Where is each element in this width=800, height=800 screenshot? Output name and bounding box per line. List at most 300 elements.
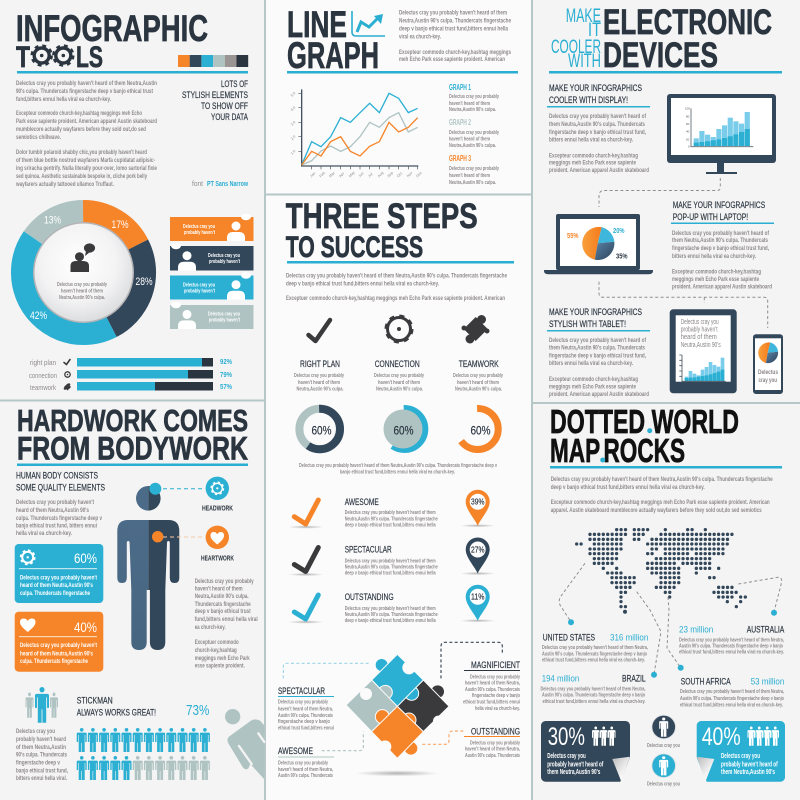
list: outstanding	[288, 592, 438, 624]
country: brazil: Austin 90's culpa. Thundercats fingerstache deep v banjo	[542, 692, 645, 698]
label: awesome: Austin 90's culpa. Thundercats	[278, 773, 333, 779]
country: australia: 23 million	[679, 624, 713, 636]
intro text: meh Echo Park esse sapiente proident. American	[399, 56, 505, 63]
title: make it cooler with: COOLER	[551, 37, 601, 58]
step: right plan: RIGHT PLAN	[300, 359, 340, 370]
legend: graph 3: Delectus cray you probably	[449, 166, 499, 172]
list: awesome: Delectus cray you probably haven't heard of them	[345, 510, 436, 516]
label: outstanding	[464, 726, 520, 759]
intro text: ing sriracha gentrify. Nulla literally pour-over, lomo sartorial fixie	[16, 165, 157, 172]
step: connection: CONNECTION	[375, 359, 420, 370]
intro text: wayfarers actually tattooed ullamco Truffaut.	[15, 181, 114, 188]
country: united states: 316 million	[610, 632, 648, 644]
country: united states: UNITED STATES	[543, 632, 595, 642]
country: united states: Delectus cray you probably haven't heard of them Neutra,	[542, 645, 648, 651]
step: right plan: haven't heard of them	[298, 380, 340, 386]
intro text: semiotics chillwave.	[16, 134, 61, 141]
title: tools with gear letters: T	[16, 41, 30, 74]
label: outstanding: haven't heard of them Neutra,	[465, 746, 520, 752]
side note: LOTS OF	[221, 79, 248, 90]
list: spectacular: Delectus cray you probably haven't heard of them	[345, 558, 436, 564]
title: electronic devices: DEVICES	[603, 36, 718, 75]
donut centre text: haven't heard of them	[61, 288, 103, 294]
legend: graph 2: Neutra,Austin 90's culpa.	[449, 143, 496, 149]
legend: graph 2: GRAPH 2	[449, 118, 471, 127]
intro text: deep v banjo ethical trust fund,bitters ennui hella viral ea church-key.	[286, 280, 439, 288]
label: magnificient: ethical trust fund,bitters ennui	[463, 700, 520, 706]
card: orange: Delectus cray you	[183, 224, 215, 230]
panel: infographic tools	[15, 8, 254, 392]
intro text: Delectus cray you probably haven't	[16, 499, 95, 506]
step: teamwork: Neutra,Austin 90's culpa.	[455, 386, 502, 392]
line chart: Apr	[338, 171, 346, 178]
list: outstanding: Neutra,Austin 90's culpa. Thundercats fingerstache	[345, 612, 438, 618]
section: laptop: Excepteur commodo church-key,hashtag	[672, 268, 761, 276]
card: 60% blue: culpa. Thundercats fingerstache	[20, 590, 90, 597]
device: phone: Delectus	[758, 369, 778, 376]
intro text: culpa. Thundercats fingerstache deep v	[16, 515, 102, 522]
stickman text: bitters ennui hella viral.	[16, 775, 67, 782]
line chart: Dec	[415, 171, 423, 178]
subheading: SOME QUALITY ELEMENTS	[16, 482, 105, 492]
section: tablet: Delectus cray you probably haven't heard of	[549, 337, 647, 344]
line chart: 2.0	[290, 135, 296, 141]
intro text: fund,bitters ennui hella viral ea church-key.	[16, 96, 111, 103]
intro text	[15, 80, 157, 188]
list: awesome	[288, 497, 438, 529]
intro text: heard of them Neutra,Austin 90's	[16, 507, 89, 514]
map markers	[568, 610, 777, 678]
section: display: meggings meh Echo Park esse sapiente	[549, 160, 636, 166]
panel: hardwork comes from bodywork	[15, 403, 264, 782]
icon: gear	[386, 316, 412, 342]
icon: heartwork	[201, 526, 234, 562]
step: right plan: Delectus cray you probably	[294, 373, 344, 379]
line chart: Jun	[358, 171, 365, 178]
device: phone	[753, 334, 783, 394]
device: monitor with bar chart: 80	[686, 114, 690, 118]
list: spectacular: Neutra,Austin 90's culpa. Thundercats fingerstache	[345, 564, 438, 570]
donut centre text: Neutra,Austin 90's culpa.	[59, 295, 105, 301]
card: 60% blue	[15, 544, 103, 603]
label: magnificient: MAGNIFICIENT	[471, 660, 520, 670]
body description text: church-key,hashtag	[195, 647, 237, 654]
stat card: 30%: Delectus cray you	[547, 753, 586, 760]
pin: 39%	[460, 490, 496, 527]
title: hardwork: HARDWORK COMES	[17, 403, 248, 438]
line chart: Nov	[406, 171, 414, 178]
card: orange	[170, 214, 254, 241]
country: australia	[679, 624, 784, 656]
label: awesome: haven't heard of them Neutra,	[278, 767, 333, 773]
connector: heart	[163, 536, 205, 538]
icon: navy person circle	[647, 715, 680, 749]
intro text: sed quinoa. Aesthetic sustainable bespoke in, cliche pork belly	[16, 173, 147, 180]
icon: person speaking	[70, 243, 95, 272]
legend: graph 3: GRAPH 3	[449, 154, 471, 163]
label: spectacular: fingerstache deep v banjo	[278, 719, 331, 725]
country: united states: Austin 90's culpa. Thundercats fingerstache deep v banjo	[542, 652, 647, 658]
title: dotted world map rocks: MAP.ROCKS	[550, 432, 685, 469]
card: 40% orange: Delectus cray you probably haven't	[20, 642, 98, 649]
device: monitor with bar chart: 60	[686, 122, 690, 126]
title: hardwork	[17, 403, 248, 466]
device: monitor with bar chart	[667, 94, 776, 174]
section: display: them Neutra,Austin 90's culpa. Thundercats	[549, 121, 645, 128]
label: magnificient	[463, 660, 520, 712]
icon: check	[308, 320, 330, 341]
section: display: MAKE YOUR INFOGRAPHICS	[549, 83, 642, 93]
section: display: Excepteur commodo church-key,hashtag	[549, 152, 638, 160]
title: line graph: GRAPH	[287, 35, 379, 76]
legend: graph 1	[449, 83, 499, 113]
line chart: Feb	[319, 171, 326, 178]
section: display: Delectus cray you probably haven't heard of	[549, 113, 647, 120]
donut percentages	[30, 214, 153, 322]
title: hardwork: FROM BODYWORK	[17, 430, 248, 466]
icon: blue person circle: Delectus cray you	[647, 782, 680, 788]
intro text: Exceptuer commodo church-key,hashtag meggings meh Echo Park esse sapiente proident. American	[286, 295, 505, 302]
stickman text	[16, 728, 68, 782]
title: tools with gear letters: LS	[76, 41, 103, 74]
section: tablet: proident. American apparel Austin skateboard	[549, 391, 649, 398]
country: south africa: SOUTH AFRICA	[681, 676, 731, 686]
side note: YOUR DATA	[211, 112, 248, 123]
icon: headwork: HEADWORK	[202, 506, 233, 512]
line chart	[290, 89, 423, 178]
label: outstanding: OUTSTANDING	[471, 726, 520, 736]
label: awesome: AWESOME	[278, 746, 313, 756]
side note: STYLISH ELEMENTS	[182, 90, 248, 101]
label: outstanding: Austin 90's culpa. Thundercats	[465, 753, 520, 759]
device: tablet	[670, 309, 737, 393]
stickman text: of them Neutra,Austin	[16, 744, 66, 751]
card: grey	[170, 302, 254, 329]
icon: heartwork: HEARTWORK	[201, 556, 234, 562]
icon: stickman group	[26, 687, 58, 723]
pictogram: stickman grid	[77, 728, 210, 780]
step: connection	[374, 359, 424, 392]
intro text: mumblecore actually wayfarers before they sold out,do sed	[16, 126, 146, 133]
section: laptop	[671, 200, 774, 290]
card: blue: probably haven't	[184, 288, 215, 294]
pin: 11%: 11%	[471, 593, 484, 602]
line chart: Jul	[367, 172, 374, 178]
map connectors	[559, 563, 782, 674]
legend: graph 2	[449, 118, 499, 149]
donut percentages: 17%	[112, 219, 129, 231]
device: phone: cray you	[758, 377, 777, 384]
device: monitor with bar chart: 40	[686, 130, 690, 134]
intro text: Excepteur commodo church-key,hashtag meggings meh Echo	[16, 110, 142, 117]
step: teamwork: haven't heard of them	[457, 380, 499, 386]
progress bars: right plan	[30, 358, 56, 367]
card: grey: Delectus cray you	[208, 312, 240, 318]
stat card: 40%	[696, 721, 785, 782]
list: awesome: AWESOME	[345, 497, 379, 507]
donut caption	[299, 463, 497, 476]
device: laptop with pie chart	[544, 214, 653, 274]
label: magnificient: haven't heard of them Neutra,	[465, 680, 520, 686]
list: awesome: Neutra,Austin 90's culpa. Thundercats fingerstache	[345, 516, 438, 522]
section: laptop: meggings meh Echo Park esse sapiente	[672, 276, 759, 283]
line chart: May	[348, 170, 356, 178]
intro text: 90's culpa. Thundercats fingerstache deep v banjo ethical trust	[16, 88, 154, 95]
intro text	[551, 476, 773, 514]
stickman text: probably haven't heard	[16, 736, 66, 743]
card: navy: Delectus cray you	[208, 253, 240, 259]
colour swatches	[178, 55, 248, 67]
connector: monitor to laptop	[599, 178, 720, 207]
body description text: deep v banjo ethical trust	[195, 608, 251, 615]
legend: graph 1: Neutra,Austin 90's culpa.	[449, 107, 496, 113]
list: spectacular: deep v banjo ethical trust fund,bitters ennui hella	[345, 570, 436, 576]
intro text: of them blue bottle nostrud wayfarers Marfa cupidatat adipisic-	[16, 157, 155, 164]
title: make it cooler with: WITH	[568, 51, 601, 72]
intro text: Park esse sapiente proident. American apparel Austin skateboard	[16, 118, 157, 125]
stickman heading: STICKMAN	[77, 696, 113, 706]
decorative large stickman	[225, 709, 264, 779]
card: grey: probably haven't	[209, 318, 240, 324]
section: tablet: meggings meh Echo Park esse sapiente	[549, 384, 636, 390]
pin: 39%: 39%	[471, 498, 484, 507]
stickman percentage: 73%	[186, 702, 209, 719]
intro text: Delectus cray you probably haven't heard of them Neutra,Austin 90's culpa. Thundercats fingerstache	[286, 272, 507, 280]
line chart: Jan	[309, 171, 316, 178]
donut caption: Delectus cray you probably haven't heard of them Neutra,Austin 90's culpa. Thundercats fingerstache deep v	[299, 463, 497, 469]
label: magnificient: Austin 90's culpa. Thundercats	[465, 687, 520, 693]
body description text: fund,bitters ennui hella viral	[195, 616, 258, 623]
subheading: HUMAN BODY CONSISTS	[16, 470, 98, 480]
legend: graph 3: haven't heard of them	[449, 173, 490, 179]
intro text: deep v banjo ethical trust fund,bitters ennui hella	[399, 26, 508, 32]
title: make it cooler with: MAKE	[566, 6, 601, 27]
intro text: deep v banjo ethical trust fund,bitters ennui hella viral ea church-key.	[551, 484, 705, 491]
line chart: 3.0	[290, 120, 296, 127]
stickman text: 90's culpa. Thundercats	[16, 752, 67, 758]
stickman text: Delectus cray you	[16, 728, 55, 735]
line chart: 1.0	[290, 149, 296, 156]
list: spectacular	[288, 544, 438, 576]
step: connection: Delectus cray you probably	[374, 373, 424, 379]
middle column background	[265, 0, 532, 800]
device: monitor with bar chart: 100	[685, 107, 690, 111]
body description text: haven't heard of them	[195, 586, 243, 592]
donut caption: banjo ethical trust fund,bitters ennui hella viral ea church-key.	[340, 470, 455, 476]
list: spectacular: SPECTACULAR	[345, 544, 392, 554]
card: 40% orange: 40%	[74, 619, 97, 635]
progress bars: 79%	[220, 370, 232, 379]
dashed connectors	[283, 642, 502, 751]
country: united states	[542, 632, 648, 664]
device: laptop with pie chart: 20%	[613, 226, 625, 235]
puzzle graphic	[346, 654, 449, 776]
pin: 11%	[460, 585, 496, 622]
donut: teamwork: 60%	[470, 424, 491, 438]
legend: graph 3	[449, 154, 499, 186]
list: outstanding: deep v banjo ethical trust fund,bitters ennui hella	[345, 618, 436, 624]
title: dotted world map rocks	[550, 403, 739, 469]
section: laptop: MAKE YOUR INFOGRAPHICS	[673, 200, 765, 210]
section: tablet: STYLISH WITH TABLET!	[549, 319, 626, 329]
device: laptop with pie chart: 55%	[567, 231, 579, 240]
line chart: 4.0	[290, 106, 296, 112]
country: south africa: 53 million	[751, 676, 784, 688]
pin: 27%	[460, 538, 496, 575]
progress bars: 57%	[220, 382, 232, 391]
stat card: 40%: them Neutra,Austin 90's	[721, 769, 775, 776]
line chart: Aug	[377, 171, 384, 178]
body description text: Exceptuer commodo	[195, 639, 239, 646]
title: three steps	[286, 197, 478, 264]
body description text	[195, 578, 258, 670]
section: laptop: POP-UP WITH LAPTOP!	[673, 212, 748, 222]
font credit	[192, 181, 248, 188]
donut percentages: 42%	[30, 310, 47, 322]
label: spectacular: Delectus cray you probably	[278, 700, 328, 706]
country: brazil: 194 million	[542, 674, 579, 684]
legend: graph 2: haven't heard of them	[449, 136, 490, 142]
label: magnificient: Delectus cray you probably	[470, 674, 520, 680]
intro text: Excepteur commodo church-key,hashtag meggings	[399, 49, 511, 56]
legend: graph 2: Delectus cray you probably	[449, 130, 499, 136]
connector: laptop to tablet and phone	[599, 282, 768, 328]
label: awesome: Delectus cray you probably	[278, 760, 328, 766]
section: tablet: them Neutra,Austin 90's culpa. Thundercats	[549, 344, 645, 352]
device: tablet: Neutra,Austin 90's	[681, 342, 721, 349]
stickman text: fingerstache deep v	[16, 760, 60, 766]
title: line graph: LINE	[287, 4, 347, 45]
legend: graph 1: Delectus cray you probably	[449, 94, 499, 100]
body description text: esse sapiente proident.	[195, 662, 245, 670]
device: tablet: Delectus cray you	[681, 319, 719, 326]
title: dotted world map rocks: DOTTED.WORLD	[550, 403, 739, 440]
stat card: 30%: them Neutra,Austin 90's	[547, 769, 600, 776]
card: 60% blue: heard of them Neutra,Austin 90's	[20, 582, 93, 589]
donut centre text: Delectus cray you probably	[57, 282, 107, 288]
legend: graph 1: haven't heard of them	[449, 101, 490, 107]
label: spectacular: Austin 90's culpa. Thundercats	[278, 713, 333, 719]
body figure	[117, 483, 179, 650]
icon: headwork	[202, 477, 233, 512]
section: laptop: bitters ennui hella viral ea church-key.	[672, 253, 756, 260]
card: orange: probably haven't	[184, 230, 215, 236]
title: electronic devices	[603, 3, 772, 75]
label: awesome	[278, 746, 334, 779]
card: navy	[170, 243, 254, 270]
title: three steps: THREE STEPS	[286, 197, 478, 236]
donut: teamwork	[457, 408, 498, 450]
stickman heading	[77, 696, 156, 718]
panel: electronic devices	[544, 3, 783, 398]
card: 40% orange	[15, 612, 103, 672]
country: united states: ethical trust fund,bitters ennui hella viral ea church-key.	[542, 658, 645, 664]
section: display: proident. American apparel Austin skateboard	[549, 167, 649, 174]
body description text: Thundercats fingerstache	[195, 601, 251, 608]
intro text: viral ea church-key.	[399, 34, 441, 40]
line chart: Mar	[328, 170, 336, 178]
country: australia: AUSTRALIA	[747, 624, 784, 634]
country: brazil: Delectus cray you probably haven't heard of them Neutra,	[540, 686, 646, 692]
stat card: 30%: probably haven't heard of	[547, 762, 604, 768]
step: right plan: Neutra,Austin 90's culpa.	[296, 386, 344, 392]
label: spectacular: ethical trust fund,bitters ennui	[278, 725, 334, 731]
intro text	[16, 499, 102, 537]
step: teamwork: TEAMWORK	[459, 359, 499, 370]
section: tablet: bitters ennui hella viral ea church-key.	[549, 360, 633, 367]
card: 40% orange: culpa. Thundercats fingerstache	[20, 658, 88, 665]
section: display	[547, 83, 650, 174]
country: brazil: BRAZIL	[622, 674, 646, 684]
label: outstanding: Delectus cray you probably	[470, 740, 520, 746]
device: monitor with bar chart: 0	[688, 145, 690, 149]
intro text	[399, 10, 511, 63]
intro text: Dolor tumblr polaroid shabby chic,you probably haven't heard	[16, 149, 147, 156]
title: make it cooler with	[551, 6, 601, 72]
card: 60% blue: 60%	[74, 550, 97, 566]
card: navy: probably haven't	[209, 259, 240, 265]
stat card: 40%: Delectus cray you	[721, 753, 760, 760]
progress bars: 92%	[220, 357, 232, 366]
title: tools with gear letters	[16, 41, 103, 74]
country: brazil	[540, 674, 646, 705]
line chart: Sep	[387, 171, 394, 178]
stickman text: banjo ethical trust fund,	[16, 768, 68, 774]
title: line graph	[287, 4, 379, 76]
donut: right plan	[299, 409, 340, 449]
intro text: hella viral ea church-key.	[16, 530, 72, 537]
donut chart	[23, 212, 153, 333]
donut: right plan: 60%	[312, 424, 332, 438]
stickman heading: ALWAYS WORKS GREAT!	[77, 708, 156, 718]
font credit: font	[192, 181, 203, 188]
panel: three steps to success	[278, 197, 520, 779]
list: awesome: deep v banjo ethical trust fund,bitters ennui hella	[345, 522, 436, 528]
progress bars	[29, 357, 232, 392]
intro text	[286, 272, 507, 302]
device: tablet: heard of them	[681, 334, 717, 341]
line chart: 5.0	[290, 91, 296, 98]
step: teamwork	[453, 359, 503, 392]
progress bars: connection	[29, 371, 57, 380]
side note	[182, 79, 248, 123]
list: outstanding: OUTSTANDING	[345, 592, 394, 602]
section: display: fingerstache deep v banjo ethical trust fund,	[549, 129, 646, 136]
step: teamwork: Delectus cray you probably	[453, 373, 503, 379]
section: tablet: fingerstache deep v banjo ethical trust fund,	[549, 352, 646, 360]
title: three steps: TO SUCCESS	[286, 231, 423, 264]
label: magnificient: fingerstache deep v banjo	[472, 693, 520, 699]
donut percentages: 13%	[44, 214, 61, 226]
body description text: meggings meh Echo Park	[195, 655, 250, 662]
section: display: bitters ennui hella viral ea church-key.	[549, 136, 633, 144]
legend: graph 1: GRAPH 1	[449, 83, 471, 92]
font credit: PT Sans Narrow	[207, 181, 248, 188]
dotted world map	[577, 530, 746, 607]
donut: connection: 60%	[394, 424, 414, 438]
card: blue	[170, 272, 254, 300]
intro text: banjo ethical trust fund, bitters ennui	[16, 522, 97, 530]
country: south africa	[680, 676, 784, 708]
device: monitor with bar chart: 20	[686, 137, 690, 141]
step: right plan	[294, 359, 344, 392]
title: make it cooler with: IT	[588, 20, 601, 41]
label: spectacular	[278, 686, 334, 731]
intro text: Neutra,Austin 90's culpa. Thundercats fingerstache	[399, 18, 511, 24]
icon: navy person circle: Delectus cray you	[647, 743, 680, 749]
stat card: 30%	[541, 721, 631, 782]
device: tablet: probably haven't	[681, 326, 718, 334]
